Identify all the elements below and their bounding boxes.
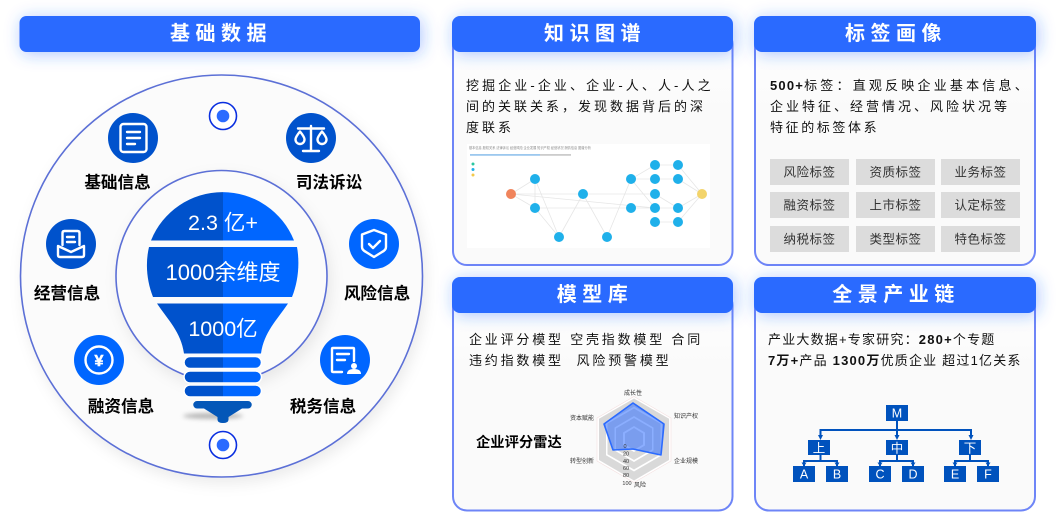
- radar axis labels: 风险: [634, 481, 646, 489]
- heading: 全景产业链: 全景产业链: [832, 282, 960, 306]
- text: 模型列表: 企业评分模型 空壳指数模型 合同: [469, 332, 703, 347]
- panel: 标签画像: [754, 16, 1036, 265]
- tag: 认定标签: 认定标签: [954, 198, 1007, 212]
- radar scale numbers: [622, 444, 632, 487]
- radar scale numbers: 80: [623, 473, 629, 479]
- item: 融资信息: ¥: [95, 353, 104, 370]
- heading: 标签画像: [754, 16, 1036, 52]
- node: 上: 上: [813, 442, 825, 456]
- node: E: E: [951, 468, 959, 482]
- tag: 类型标签: [856, 226, 935, 252]
- tag: 纳税标签: 纳税标签: [783, 232, 836, 246]
- text: 标签画像说明: 特征的标签体系: [770, 120, 879, 135]
- radar scale numbers: 20: [623, 452, 629, 458]
- node: B: [826, 466, 848, 482]
- item: 风险信息: 风险信息: [344, 283, 410, 303]
- item: 司法诉讼: 司法诉讼: [296, 173, 363, 192]
- outer ring: [20, 75, 422, 477]
- node: E: [944, 466, 966, 482]
- heading: 全景产业链: [754, 277, 1036, 313]
- bulb dome: 2.3亿+: 2.3 亿+: [188, 211, 258, 235]
- node: C: [869, 466, 891, 482]
- bulb coils: [184, 356, 262, 397]
- tag: 资质标签: [856, 159, 935, 185]
- bulb dome: 2.3亿+: [151, 192, 294, 240]
- node: 下: [959, 440, 981, 456]
- bulb neck: 1000亿: 1000亿: [188, 317, 258, 341]
- heading: 基础数据: 基础数据: [170, 22, 272, 45]
- tag: 业务标签: 业务标签: [954, 164, 1007, 180]
- node: D: [902, 466, 924, 482]
- text: 知识图谱说明: 度联系: [466, 120, 514, 135]
- lightbulb: [147, 192, 298, 423]
- inner ring: [116, 170, 327, 382]
- heading: 知识图谱: [452, 16, 733, 52]
- item: 经营信息: [34, 219, 100, 303]
- panel: 模型库: [452, 277, 733, 510]
- radar axis labels: 转型创新: [570, 457, 594, 465]
- node: 中: [886, 440, 908, 456]
- text: 产业链说明: [768, 332, 1022, 368]
- text: 知识图谱说明: [466, 78, 714, 135]
- item: 税务信息: 税务信息: [290, 396, 356, 416]
- tag: 业务标签: [941, 159, 1020, 185]
- heading: 标签画像: 标签画像: [845, 22, 947, 45]
- bulb band: 1000余维度: [147, 247, 298, 297]
- chart: radar: [570, 389, 698, 489]
- radar scale numbers: 0: [623, 444, 627, 450]
- node: F: [977, 466, 999, 482]
- tag: 资质标签: 资质标签: [869, 164, 922, 180]
- radar scale numbers: 100: [622, 481, 632, 487]
- node: M: M: [892, 406, 902, 420]
- node: M: [886, 405, 908, 421]
- text: 标签画像说明: [770, 78, 1031, 135]
- panel: 基础数据: [20, 16, 422, 477]
- text: 模型列表: [469, 332, 703, 368]
- radar axis labels: 资本赋能: [570, 414, 594, 422]
- text: 产业链说明: 7万+产品 1300万优质企业 超过1亿关系: [768, 353, 1022, 368]
- radar scale numbers: 60: [623, 466, 629, 472]
- chart: industry chain tree: [793, 405, 999, 482]
- radar axis labels: 企业规模: [674, 457, 698, 465]
- radar series polygon: [604, 403, 664, 455]
- panel: 全景产业链: [754, 277, 1036, 510]
- label: 企业评分雷达: 企业评分雷达: [476, 433, 562, 451]
- text: 标签画像说明: 500+标签：直观反映企业基本信息、: [770, 78, 1031, 93]
- tag: 认定标签: [941, 192, 1020, 218]
- panel: 知识图谱: [452, 16, 733, 265]
- tag: 融资标签: [770, 192, 849, 218]
- chart: knowledge graph: [467, 144, 710, 248]
- node: 下: 下: [964, 442, 976, 456]
- node: 中: 中: [891, 440, 903, 456]
- tag: 特色标签: 特色标签: [954, 232, 1007, 246]
- text: 产业链说明: 产业大数据+专家研究：280+个专题: [768, 332, 996, 347]
- chart: knowledge graph: 基本信息 股权关系 法律诉讼 经营风险 企业发展 知识产权 经营状况 舆情信息 图谱分析: [469, 145, 592, 150]
- tag: 风险标签: 风险标签: [783, 164, 836, 180]
- item: 经营信息: 经营信息: [34, 283, 100, 303]
- node: D: D: [908, 468, 918, 482]
- bulb neck: 1000亿: [157, 304, 288, 354]
- node: B: B: [833, 468, 841, 482]
- bulb band: 1000余维度: 1000余维度: [166, 260, 280, 285]
- node: F: F: [984, 468, 992, 482]
- radar axis labels: [570, 389, 698, 489]
- node: A: [793, 466, 815, 482]
- radar scale numbers: 40: [623, 459, 629, 465]
- node: A: A: [800, 468, 809, 482]
- tag: 风险标签: [770, 159, 849, 185]
- node: 上: [808, 440, 830, 456]
- text: 标签画像说明: 企业特征、经营情况、风险状况等: [770, 99, 1010, 114]
- tag: 纳税标签: [770, 226, 849, 252]
- text: 知识图谱说明: 挖掘企业-企业、企业-人、人-人之: [466, 78, 714, 93]
- item: 融资信息: [74, 335, 154, 416]
- tag: 上市标签: [856, 192, 935, 218]
- heading: 模型库: [452, 277, 733, 313]
- heading: 知识图谱: 知识图谱: [544, 22, 646, 45]
- tag: 融资标签: 融资标签: [783, 198, 836, 212]
- item: 基础信息: 基础信息: [84, 172, 151, 192]
- heading: 模型库: 模型库: [557, 283, 633, 306]
- text: 知识图谱说明: 间的关联关系，发现数据背后的深: [466, 99, 706, 114]
- tag: 上市标签: 上市标签: [869, 198, 922, 212]
- tag: 特色标签: [941, 226, 1020, 252]
- heading: 基础数据: [20, 16, 420, 52]
- tag: 类型标签: 类型标签: [869, 232, 922, 246]
- bulb base: [183, 401, 252, 423]
- tag grid: [770, 159, 1020, 252]
- item: 司法诉讼: [286, 113, 363, 192]
- item: 风险信息: [344, 219, 410, 303]
- item: 融资信息: 融资信息: [88, 396, 154, 416]
- item: 税务信息: [290, 335, 370, 416]
- radar axis labels: 成长性: [624, 389, 642, 397]
- top marker: [210, 102, 236, 130]
- bottom marker: [210, 432, 236, 458]
- text: 模型列表: 违约指数模型 风险预警模型: [469, 353, 671, 368]
- node: C: C: [875, 468, 885, 482]
- radar axis labels: 知识产权: [674, 412, 698, 420]
- item: 基础信息: [84, 113, 158, 192]
